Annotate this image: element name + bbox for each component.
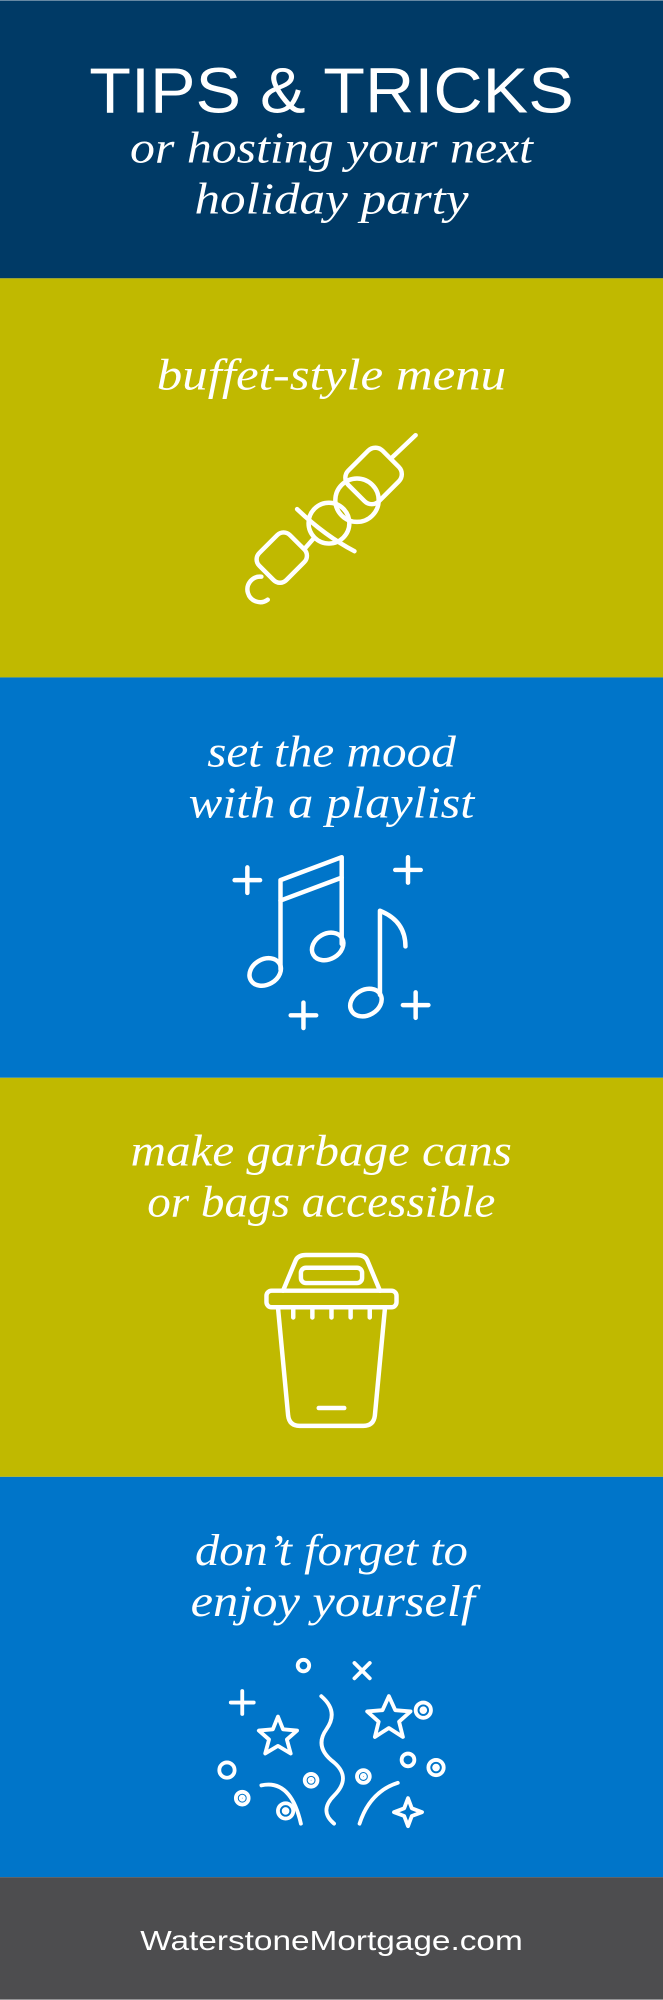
panel: playlist xyxy=(0,677,663,1078)
heading: set the mood xyxy=(207,727,457,777)
heading xyxy=(189,727,476,828)
heading: or bags accessible xyxy=(147,1177,495,1227)
heading: enjoy yourself xyxy=(191,1576,481,1626)
icon: confetti xyxy=(219,1660,444,1826)
icon: skewer xyxy=(247,435,416,602)
panel: header xyxy=(0,0,663,278)
footer xyxy=(0,1877,663,2000)
panel: buffet-style menu xyxy=(0,278,663,677)
icon: trash can xyxy=(266,1255,397,1426)
icon: music notes xyxy=(235,857,428,1028)
heading: make garbage cans xyxy=(131,1126,512,1176)
subtitle xyxy=(130,122,535,223)
subtitle: holiday party xyxy=(194,173,469,223)
panel: garbage cans xyxy=(0,1078,663,1477)
heading: buffet-style menu xyxy=(157,349,506,399)
title: TIPS & TRICKS xyxy=(89,55,574,127)
subtitle: or hosting your next xyxy=(130,122,535,172)
heading xyxy=(191,1525,481,1626)
panel: enjoy yourself xyxy=(0,1477,663,1877)
footer text: WaterstoneMortgage.com xyxy=(140,1925,523,1956)
heading: with a playlist xyxy=(189,778,476,828)
heading: don’t forget to xyxy=(195,1525,468,1575)
heading xyxy=(131,1126,512,1227)
